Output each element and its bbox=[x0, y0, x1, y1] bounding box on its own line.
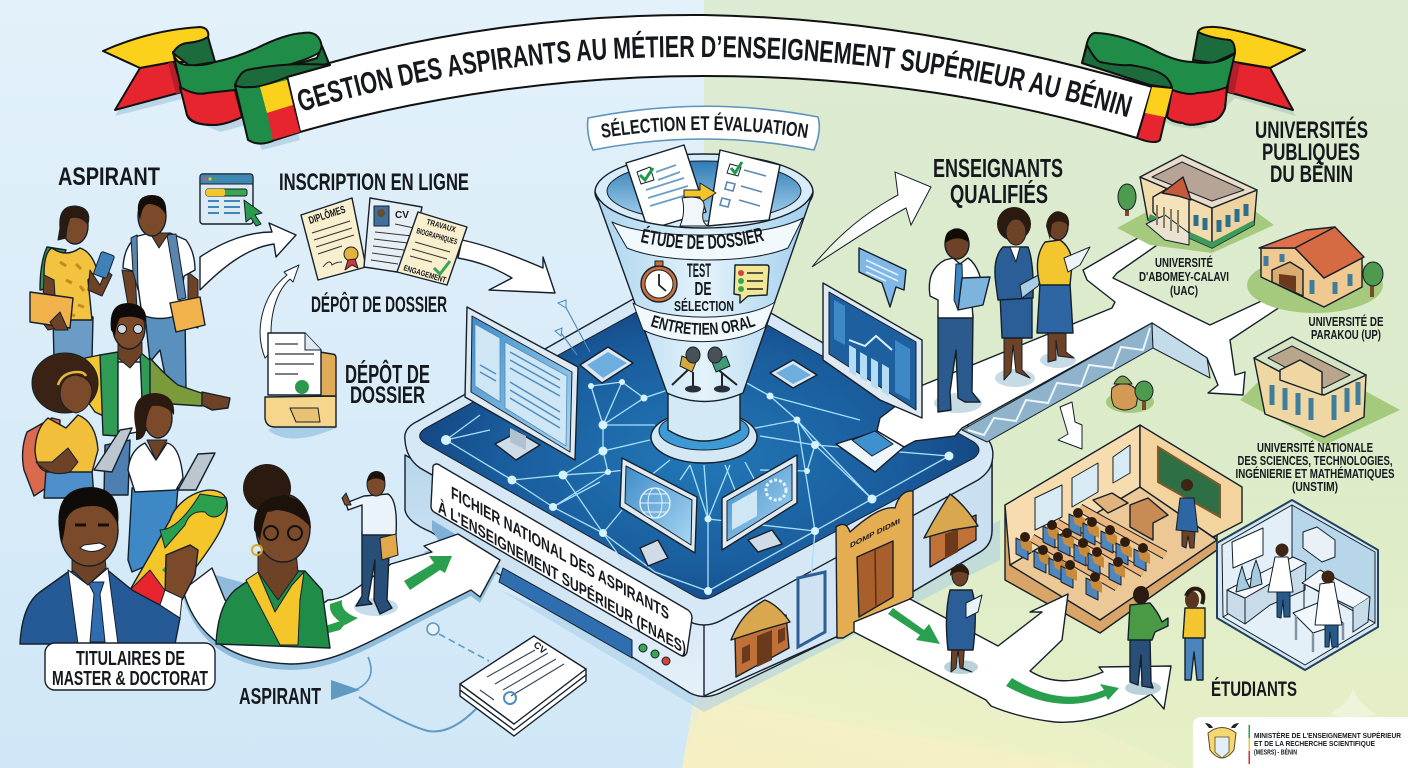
heading: inscription en ligne: INSCRIPTION EN LIGNE bbox=[279, 169, 469, 196]
left wall bbox=[1005, 425, 1140, 565]
title banner bbox=[102, 14, 1306, 150]
label: aspirant bottom: ASPIRANT bbox=[239, 683, 321, 709]
document stack: cv bbox=[460, 636, 586, 736]
person: teacher on lower path bbox=[944, 564, 982, 674]
label: Parakou: PARAKOU (UP) bbox=[1311, 328, 1381, 342]
floor bbox=[1223, 577, 1375, 665]
left ribbon tail bbox=[103, 27, 330, 150]
arrow: bridge to classroom bbox=[1058, 402, 1082, 449]
person: aspirant in white shirt with tablet bbox=[128, 393, 215, 572]
heading: enseignants qualifiés: QUALIFIÉS bbox=[950, 179, 1048, 209]
teacher: man with tablet bbox=[929, 229, 990, 413]
icon: small hut and tree bbox=[1106, 376, 1154, 413]
coat of arms bbox=[1205, 723, 1239, 758]
label: étudiants: ÉTUDIANTS bbox=[1211, 678, 1297, 701]
poster bbox=[1232, 528, 1263, 568]
heading: enseignants qualifiés bbox=[933, 153, 1063, 209]
network nodes bbox=[441, 379, 954, 595]
label: UAC: (UAC) bbox=[1170, 284, 1198, 298]
person: aspirant with glasses and green jacket bbox=[83, 303, 230, 495]
ministry text: ET DE LA RECHERCHE SCIENTIFIQUE bbox=[1254, 739, 1375, 748]
tablet on platform edge bbox=[836, 431, 904, 472]
commitment letter: BIOGRAPHIQUES bbox=[415, 226, 459, 247]
icon: hut on upper wall bbox=[924, 494, 978, 567]
icon: checklist bubble bbox=[734, 265, 769, 303]
right ribbon tail bbox=[1082, 27, 1305, 128]
teacher in classroom bbox=[1176, 479, 1198, 548]
label: test de sélection: TEST bbox=[687, 261, 711, 282]
left wall bbox=[1222, 505, 1292, 617]
yellow transfer arrow bbox=[684, 183, 716, 203]
heading: universités publiques du bénin: DU BÉNIN bbox=[1270, 160, 1353, 188]
heading: aspirant: ASPIRANT bbox=[58, 163, 160, 191]
glassware bbox=[1236, 560, 1262, 592]
laboratory bbox=[1217, 500, 1378, 670]
person: student in green bbox=[1125, 586, 1168, 695]
tree bbox=[1363, 262, 1383, 297]
funnel base bbox=[651, 385, 757, 463]
cabinet bbox=[1303, 527, 1335, 562]
tricolour divider bbox=[1248, 725, 1250, 764]
ministry logo box bbox=[1193, 717, 1408, 768]
arrow: documents to funnel bbox=[458, 240, 555, 293]
teacher: woman in yellow bbox=[1037, 212, 1090, 368]
teacher: woman in blue suit bbox=[995, 207, 1044, 387]
ribbon right end bbox=[1137, 87, 1172, 142]
label: test de sélection bbox=[674, 261, 734, 315]
label: étude de dossier: ÉTUDE DE DOSSIER bbox=[640, 226, 764, 249]
diploma bbox=[301, 198, 366, 280]
heading: sélection et évaluation bbox=[586, 106, 820, 151]
person: student in yellow bbox=[1183, 589, 1205, 680]
commitment letter bbox=[397, 212, 467, 285]
label: UAC: UNIVERSITÉ bbox=[1155, 255, 1213, 270]
funnel cone bbox=[595, 192, 813, 402]
platform walls bbox=[405, 455, 992, 696]
rolled flag of Benin bbox=[130, 490, 227, 625]
right bench bbox=[1302, 570, 1370, 608]
label: dépôt de dossier: DÉPÔT DE DOSSIER bbox=[311, 292, 447, 317]
table bbox=[1293, 602, 1343, 633]
label: UAC bbox=[1139, 255, 1229, 298]
label: entretien oral: ENTRETIEN ORAL bbox=[650, 315, 756, 335]
university: Parakou building bbox=[1247, 227, 1383, 313]
monitor: right chart screen bbox=[823, 283, 922, 418]
right wall bbox=[1140, 425, 1242, 537]
lectern and desk bbox=[1093, 493, 1168, 540]
commitment letter: TRAVAUX bbox=[425, 217, 457, 234]
person: graduate in suit bbox=[20, 487, 198, 644]
FNAES label: À L'ENSEIGNEMENT SUPÉRIEUR (FNAES) bbox=[438, 496, 686, 658]
green arrow bbox=[404, 556, 452, 590]
person: aspirant in white polo bbox=[122, 195, 205, 390]
cursor bbox=[244, 200, 262, 226]
floor bbox=[1010, 487, 1217, 620]
label: dépôt de dossier second bbox=[345, 359, 430, 409]
classroom bbox=[1005, 425, 1242, 633]
platform top rim bbox=[405, 272, 993, 625]
label: test de sélection: SÉLECTION bbox=[674, 298, 734, 315]
truss bridge bbox=[962, 323, 1210, 442]
green arrow two bbox=[1006, 678, 1119, 704]
ribbon left end bbox=[235, 64, 330, 144]
icon: stopwatch bbox=[641, 261, 677, 302]
person: aspirant walking with folder bbox=[342, 471, 398, 616]
document left in funnel bbox=[626, 145, 706, 230]
curled page bbox=[680, 197, 708, 226]
ministry text bbox=[1254, 731, 1402, 756]
person: aspirant with afro and tablet bbox=[23, 353, 132, 498]
icon: folder with document bbox=[265, 333, 336, 439]
scientist one bbox=[1268, 544, 1293, 618]
sparkle bbox=[1330, 688, 1376, 718]
server slot and LEDs bbox=[432, 520, 670, 665]
heading: sélection et évaluation: SÉLECTION ET ÉVALUATION bbox=[601, 112, 808, 138]
university: UAC building bbox=[1117, 155, 1274, 253]
label: Parakou bbox=[1308, 314, 1384, 342]
students seated bbox=[1016, 508, 1150, 600]
funnel band 2 bbox=[633, 302, 775, 342]
label: dépôt de dossier second: DOSSIER bbox=[350, 382, 425, 409]
label: UNSTIM: (UNSTIM) bbox=[1292, 479, 1338, 494]
blackboard bbox=[1158, 447, 1220, 517]
FNAES label bbox=[431, 464, 692, 658]
desk rows bbox=[1032, 508, 1165, 587]
arrow: aspirant to documents bbox=[200, 223, 296, 290]
green arrow one bbox=[888, 608, 940, 644]
left bench bbox=[1227, 563, 1306, 624]
arrow: funnel to qualified teachers bbox=[812, 172, 931, 267]
windows bbox=[1035, 445, 1130, 530]
ribbon white band bbox=[287, 15, 1152, 138]
heading: universités publiques du bénin: PUBLIQUES bbox=[1262, 139, 1360, 166]
university: UNSTIM building bbox=[1240, 337, 1400, 445]
label: titulaires de master et doctorat bbox=[45, 643, 215, 690]
label: UNSTIM bbox=[1236, 440, 1395, 494]
commitment letter: ENGAGEMENT bbox=[402, 263, 447, 285]
funnel mouth bbox=[595, 154, 813, 230]
document stack: cv: CV bbox=[531, 640, 549, 657]
platform: national database bbox=[405, 272, 1000, 712]
monitor: left large screen bbox=[465, 307, 578, 460]
title text: GESTION DES ASPIRANTS AU MÉTIER D’ENSEIGNEMENT SUPÉRIEUR AU BÉNIN bbox=[298, 30, 1132, 117]
curriculum vitae bbox=[364, 198, 422, 272]
icon: browser window bbox=[200, 174, 262, 226]
heading: enseignants qualifiés: ENSEIGNANTS bbox=[933, 153, 1063, 183]
label: dépôt de dossier second: DÉPÔT DE bbox=[345, 359, 430, 389]
gate bbox=[836, 491, 913, 638]
gate: DOMP DIDMI bbox=[850, 516, 900, 550]
network lines bbox=[446, 382, 949, 591]
connector: cv stack to aspirant bbox=[331, 623, 489, 732]
funnel band 1 bbox=[612, 218, 803, 260]
arrow: folder to documents bbox=[260, 265, 299, 358]
platform shadow bbox=[500, 520, 1000, 712]
tablet right side bbox=[770, 360, 817, 388]
speech bubble above monitor bbox=[859, 248, 906, 307]
icon: door on wall bbox=[798, 572, 825, 647]
diploma: DIPLÔMES bbox=[307, 203, 347, 227]
monitor: globe screen bbox=[620, 458, 697, 566]
white arrow: into the file bbox=[183, 534, 500, 670]
funnel: selection and evaluation bbox=[594, 144, 814, 464]
path network to universities bbox=[877, 235, 1283, 447]
tree bbox=[1118, 184, 1136, 216]
person: graduate with glasses bbox=[216, 464, 330, 648]
scientist two bbox=[1315, 570, 1342, 647]
icon: microphones bbox=[672, 347, 737, 392]
person: aspirant in yellow shirt bbox=[30, 206, 115, 360]
label: UAC: D'ABOMEY-CALAVI bbox=[1139, 270, 1229, 284]
icon: hut on lower wall bbox=[731, 600, 790, 677]
platform blue surface with network bbox=[420, 286, 979, 599]
lower white arrow from gate bbox=[854, 594, 1171, 722]
heading: universités publiques du bénin bbox=[1255, 116, 1368, 188]
documents: dossier set bbox=[301, 198, 467, 285]
curriculum vitae: CV bbox=[395, 210, 409, 221]
right wall bbox=[1292, 505, 1375, 623]
label: titulaires de master et doctorat: MASTER & DOCTORAT bbox=[52, 668, 208, 690]
label: titulaires de master et doctorat: TITULAIRES DE bbox=[76, 648, 185, 670]
ministry text: (MESRS) - BÉNIN bbox=[1254, 748, 1297, 756]
FNAES label: FICHIER NATIONAL DES ASPIRANTS bbox=[451, 482, 669, 624]
monitor: gear screen bbox=[722, 455, 797, 552]
base bbox=[1005, 505, 1217, 633]
label: test de sélection: DE bbox=[694, 279, 712, 299]
tablet on surface left bbox=[555, 300, 633, 383]
label: Parakou: UNIVERSITÉ DE bbox=[1308, 314, 1384, 329]
document right in funnel bbox=[708, 150, 780, 226]
